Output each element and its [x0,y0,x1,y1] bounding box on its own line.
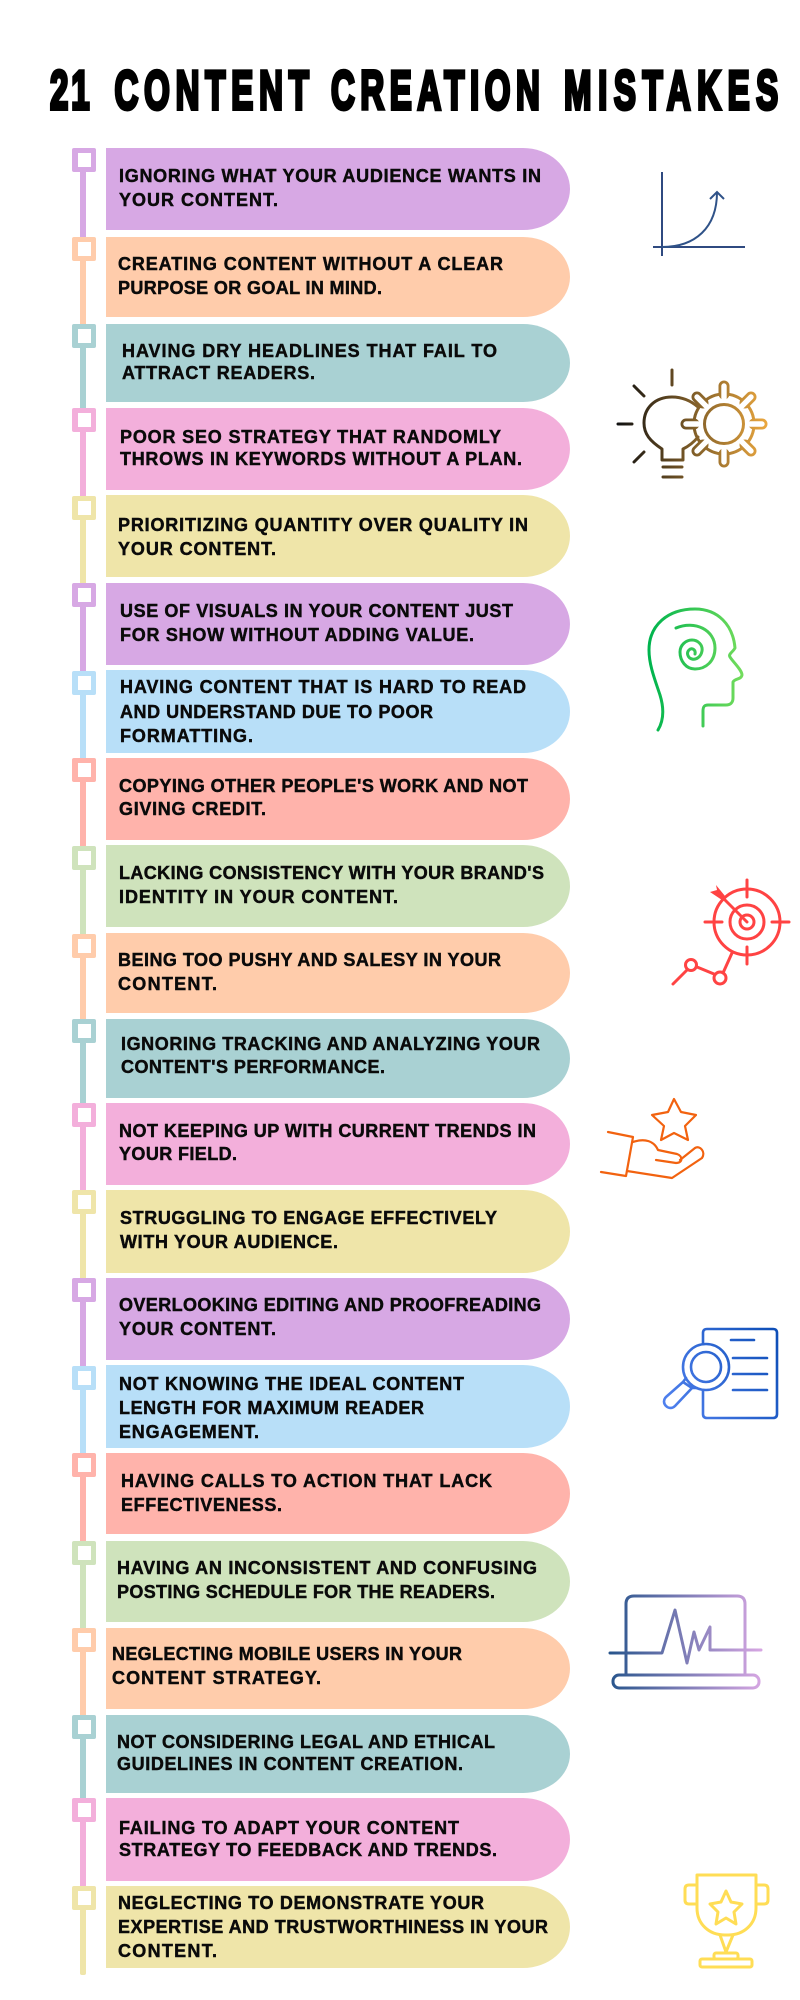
item 7 [106,670,570,753]
item 11: CONTENT'S PERFORMANCE. [121,1057,385,1077]
item 13 [106,1190,570,1273]
item 8: COPYING OTHER PEOPLE'S WORK AND NOT [119,776,528,796]
item 7: HAVING CONTENT THAT IS HARD TO READ [120,677,526,697]
icon: trophy [685,1875,768,1967]
item 3: ATTRACT READERS. [122,363,315,383]
icon: light bulb and gear [618,370,762,477]
item 21: CONTENT. [118,1941,217,1961]
item 19 [106,1715,570,1793]
item 4 [106,408,570,490]
item 11 [106,1019,570,1098]
item 18: NEGLECTING MOBILE USERS IN YOUR [112,1644,462,1664]
item 17: POSTING SCHEDULE FOR THE READERS. [117,1582,495,1602]
item 21 [106,1886,570,1968]
item 18 [106,1628,570,1709]
item 15 [106,1365,570,1448]
item 6 [106,583,570,665]
item 10: CONTENT. [118,974,217,994]
item 2: CREATING CONTENT WITHOUT A CLEAR [118,254,503,274]
item 12 [106,1103,570,1185]
item 12: NOT KEEPING UP WITH CURRENT TRENDS IN [119,1121,536,1141]
icon: growth chart [653,172,745,256]
item 8 [106,758,570,840]
item 13: STRUGGLING TO ENGAGE EFFECTIVELY [120,1208,497,1228]
item 1: YOUR CONTENT. [119,190,278,210]
item 15: NOT KNOWING THE IDEAL CONTENT [119,1374,464,1394]
item 12: YOUR FIELD. [119,1144,237,1164]
title: MISTAKES [564,59,778,121]
item 20: STRATEGY TO FEEDBACK AND TRENDS. [119,1840,497,1860]
item 9: IDENTITY IN YOUR CONTENT. [119,887,398,907]
item 6: USE OF VISUALS IN YOUR CONTENT JUST [120,601,513,621]
item 10: BEING TOO PUSHY AND SALESY IN YOUR [118,950,501,970]
item 16: HAVING CALLS TO ACTION THAT LACK [121,1471,492,1491]
item 20 [106,1798,570,1881]
item 9 [106,845,570,927]
item 21: EXPERTISE AND TRUSTWORTHINESS IN YOUR [118,1917,548,1937]
icon: laptop with pulse [610,1596,761,1688]
item 14: OVERLOOKING EDITING AND PROOFREADING [119,1295,541,1315]
timeline [72,148,96,1975]
item 15: ENGAGEMENT. [119,1422,259,1442]
item 14 [106,1278,570,1360]
item 8: GIVING CREDIT. [119,799,266,819]
title: 21 [50,59,90,121]
item 14: YOUR CONTENT. [119,1319,276,1339]
item 17 [106,1541,570,1622]
item 3 [106,324,570,402]
item 13: WITH YOUR AUDIENCE. [120,1232,338,1252]
icon: document with magnifier [664,1329,777,1418]
item 11: IGNORING TRACKING AND ANALYZING YOUR [121,1034,540,1054]
item 21: NEGLECTING TO DEMONSTRATE YOUR [118,1893,484,1913]
item 5: PRIORITIZING QUANTITY OVER QUALITY IN [118,515,528,535]
icon: target with dart [673,880,789,984]
item 2 [106,237,570,317]
item 16 [106,1453,570,1534]
item 16: EFFECTIVENESS. [121,1495,282,1515]
item 7: AND UNDERSTAND DUE TO POOR [120,702,433,722]
icon: head with spiral [649,609,742,730]
item 17: HAVING AN INCONSISTENT AND CONFUSING [117,1558,537,1578]
item 18: CONTENT STRATEGY. [112,1668,321,1688]
item 5: YOUR CONTENT. [118,539,276,559]
title [50,59,778,121]
item 3: HAVING DRY HEADLINES THAT FAIL TO [122,341,497,361]
item 5 [106,495,570,577]
item 19: GUIDELINES IN CONTENT CREATION. [117,1754,463,1774]
title: CREATION [331,59,540,121]
item 4: THROWS IN KEYWORDS WITHOUT A PLAN. [120,449,522,469]
item 15: LENGTH FOR MAXIMUM READER [119,1398,424,1418]
title: CONTENT [114,59,309,121]
item 9: LACKING CONSISTENCY WITH YOUR BRAND'S [119,863,544,883]
item 2: PURPOSE OR GOAL IN MIND. [118,278,382,298]
item 7: FORMATTING. [120,726,253,746]
item 1: IGNORING WHAT YOUR AUDIENCE WANTS IN [119,166,541,186]
icon: hand holding star [601,1099,703,1178]
item 1 [106,148,570,230]
item 4: POOR SEO STRATEGY THAT RANDOMLY [120,427,501,447]
item 19: NOT CONSIDERING LEGAL AND ETHICAL [117,1732,495,1752]
item 20: FAILING TO ADAPT YOUR CONTENT [119,1818,459,1838]
item 6: FOR SHOW WITHOUT ADDING VALUE. [120,625,474,645]
item 10 [106,933,570,1013]
